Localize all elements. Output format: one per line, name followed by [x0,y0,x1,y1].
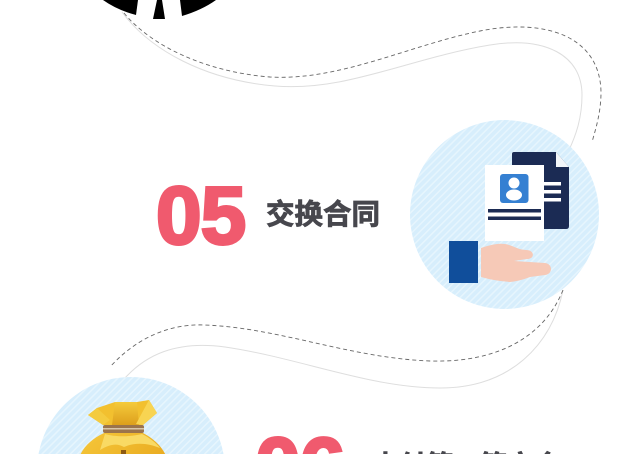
heading number: 05: 05 [156,170,245,262]
icon: white profile sheet [485,165,544,241]
panel: step 05 illustration [410,120,599,309]
icon: dark back document [512,152,569,229]
heading: exchange contract: 交换合同 [266,199,380,231]
icon: money bag [74,400,172,454]
connector: upper grey curve [122,12,582,150]
connector: lower grey curve [125,290,563,388]
icon: pale blue circle [37,377,225,454]
icon: black circle fragment at top [103,0,216,19]
icon: open hand [481,244,551,282]
connector: upper dashed curve [124,13,601,142]
panel: step 06 illustration [37,377,225,454]
icon: blue sleeve [449,241,478,283]
icon: pale blue circle [410,120,599,309]
connector: lower dashed curve [110,290,563,367]
